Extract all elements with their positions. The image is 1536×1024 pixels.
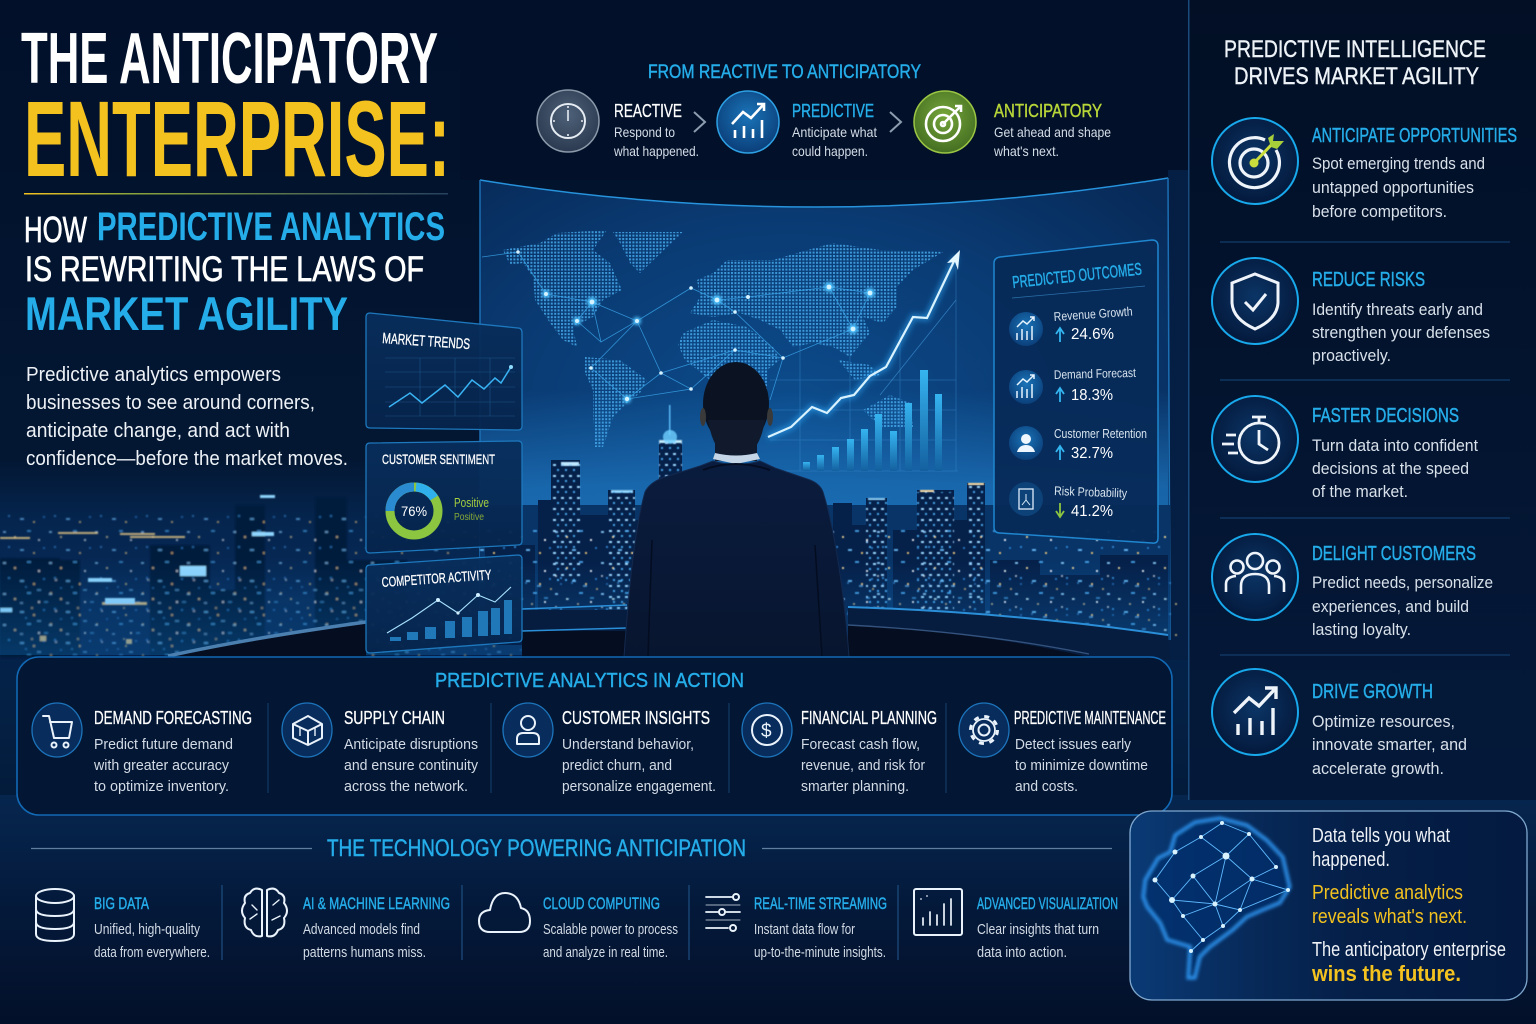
tech: real-time streaming: REAL-TIME STREAMING bbox=[754, 894, 887, 913]
panel: predicted outcomes bbox=[994, 240, 1158, 543]
benefit: drive growth: innovate smarter, and bbox=[1312, 735, 1467, 754]
arrow: predictive to anticipatory bbox=[890, 112, 901, 132]
step: reactive: Respond to bbox=[614, 124, 675, 140]
title bbox=[21, 19, 450, 199]
panel: predictive intelligence drives market agility: DRIVES MARKET AGILITY bbox=[1234, 63, 1479, 90]
left city skyline bbox=[0, 460, 657, 664]
item: supply chain: across the network. bbox=[344, 778, 468, 795]
item: financial planning bbox=[742, 703, 937, 795]
tech: real-time streaming bbox=[706, 894, 887, 961]
tech: advanced visualization: data into action. bbox=[977, 944, 1067, 961]
step: anticipatory: what's next. bbox=[993, 143, 1059, 159]
step: predictive bbox=[717, 91, 877, 159]
tech: big data: data from everywhere. bbox=[94, 944, 210, 961]
intro paragraph: businesses to see around corners, bbox=[26, 392, 315, 414]
central holographic screen bbox=[480, 178, 1181, 645]
growth arrow bbox=[768, 250, 960, 437]
item: demand forecasting: DEMAND FORECASTING bbox=[94, 708, 252, 728]
railing and floor bbox=[168, 605, 1170, 660]
benefit: delight customers: Predict needs, personalize bbox=[1312, 573, 1493, 592]
benefit: faster decisions: of the market. bbox=[1312, 482, 1408, 501]
item: predictive maintenance: Detect issues early bbox=[1015, 736, 1131, 753]
benefit: reduce risks: proactively. bbox=[1312, 346, 1391, 365]
item: supply chain: SUPPLY CHAIN bbox=[344, 708, 445, 728]
benefit: reduce risks: strengthen your defenses bbox=[1312, 323, 1490, 342]
step: predictive: could happen. bbox=[792, 143, 868, 159]
benefit: drive growth bbox=[1212, 669, 1467, 778]
chart bars bbox=[803, 370, 942, 471]
benefit: faster decisions bbox=[1212, 396, 1478, 501]
step: anticipatory bbox=[914, 91, 1111, 159]
benefit: delight customers bbox=[1212, 534, 1493, 639]
panel: customer sentiment: 76% bbox=[401, 504, 427, 519]
tech: advanced visualization: ADVANCED VISUALIZATION bbox=[977, 894, 1118, 913]
tech: ai and machine learning: Advanced models find bbox=[303, 921, 420, 938]
item: demand forecasting bbox=[32, 703, 252, 795]
outcome: demand forecast: Demand Forecast bbox=[1054, 366, 1136, 382]
step: reactive: what happened. bbox=[613, 143, 699, 159]
step: reactive bbox=[537, 90, 699, 159]
item: customer insights bbox=[503, 703, 716, 795]
item: financial planning: Forecast cash flow, bbox=[801, 736, 920, 753]
item: predictive maintenance: PREDICTIVE MAINTENANCE bbox=[1014, 708, 1166, 728]
step: predictive: PREDICTIVE bbox=[792, 101, 874, 121]
tech: big data: Unified, high-quality bbox=[94, 921, 200, 938]
intro paragraph: Predictive analytics empowers bbox=[26, 364, 281, 386]
panel: predictive intelligence drives market agility bbox=[1212, 36, 1517, 778]
item: predictive maintenance: to minimize downtime bbox=[1015, 757, 1148, 774]
benefit: anticipate opportunities: untapped opportunities bbox=[1312, 178, 1474, 197]
tech: ai and machine learning: AI & MACHINE LEARNING bbox=[303, 894, 450, 913]
tech: big data bbox=[36, 889, 210, 961]
benefit: delight customers: DELIGHT CUSTOMERS bbox=[1312, 543, 1476, 565]
benefit: drive growth: DRIVE GROWTH bbox=[1312, 681, 1433, 703]
intro paragraph: confidence—before the market moves. bbox=[26, 448, 348, 470]
benefit: drive growth: accelerate growth. bbox=[1312, 759, 1444, 778]
tech: big data: BIG DATA bbox=[94, 894, 149, 913]
intro paragraph: anticipate change, and act with bbox=[26, 420, 290, 442]
item: customer insights: personalize engagement. bbox=[562, 778, 716, 795]
benefit: faster decisions: Turn data into confident bbox=[1312, 436, 1478, 455]
panel: predictive analytics in action: PREDICTIVE ANALYTICS IN ACTION bbox=[435, 670, 744, 692]
tech: ai and machine learning: patterns humans miss. bbox=[303, 944, 426, 961]
title divider bbox=[24, 193, 448, 194]
growth chart bbox=[768, 250, 960, 471]
panel: market trends bbox=[366, 313, 522, 430]
person silhouette bbox=[624, 362, 849, 657]
item: financial planning: revenue, and risk for bbox=[801, 757, 925, 774]
outcome: revenue growth bbox=[1009, 305, 1133, 346]
city on screen bbox=[480, 405, 1181, 645]
subtitle: IS REWRITING THE LAWS OF bbox=[25, 250, 424, 289]
callout text: happened. bbox=[1312, 849, 1390, 871]
title: ENTERPRISE: bbox=[24, 78, 450, 199]
outcome: risk probability bbox=[1009, 482, 1128, 520]
tech: cloud computing: Scalable power to process bbox=[543, 921, 678, 938]
item: financial planning: smarter planning. bbox=[801, 778, 909, 795]
outcome: risk probability: 41.2% bbox=[1071, 503, 1113, 520]
item: customer insights: predict churn, and bbox=[562, 757, 672, 774]
item: demand forecasting: Predict future demand bbox=[94, 736, 233, 753]
subtitle bbox=[24, 205, 445, 340]
benefit: delight customers: lasting loyalty. bbox=[1312, 620, 1411, 639]
step: anticipatory: ANTICIPATORY bbox=[994, 101, 1102, 121]
tech: cloud computing: and analyze in real time. bbox=[543, 944, 668, 961]
subtitle: MARKET AGILITY bbox=[25, 287, 348, 340]
panel: customer sentiment bbox=[366, 441, 522, 553]
outcome: revenue growth: 24.6% bbox=[1071, 326, 1114, 343]
step: anticipatory: Get ahead and shape bbox=[994, 124, 1111, 140]
step: reactive: REACTIVE bbox=[614, 101, 682, 121]
reactive to anticipatory strip bbox=[537, 62, 1111, 159]
item: financial planning: $ bbox=[761, 721, 772, 742]
arrow: reactive to predictive bbox=[694, 112, 705, 132]
benefit: anticipate opportunities: before competitors. bbox=[1312, 202, 1447, 221]
callout text: wins the future. bbox=[1311, 961, 1461, 986]
panel: customer sentiment: Positive bbox=[454, 512, 484, 523]
tech: advanced visualization bbox=[914, 889, 1118, 961]
subtitle: PREDICTIVE ANALYTICS bbox=[97, 205, 445, 249]
subtitle: HOW bbox=[24, 209, 87, 250]
panel: competitor activity: COMPETITOR ACTIVITY bbox=[381, 566, 492, 590]
outcome: demand forecast bbox=[1009, 366, 1136, 404]
outcome: demand forecast: 18.3% bbox=[1071, 387, 1113, 404]
panel: customer sentiment: CUSTOMER SENTIMENT bbox=[382, 451, 495, 467]
benefit: reduce risks: Identify threats early and bbox=[1312, 300, 1483, 319]
item: predictive maintenance bbox=[959, 703, 1166, 795]
tech: real-time streaming: Instant data flow for bbox=[754, 921, 855, 938]
panel: competitor activity bbox=[366, 555, 522, 653]
outcome: risk probability: Risk Probability bbox=[1054, 484, 1128, 501]
outcome: revenue growth: Revenue Growth bbox=[1053, 305, 1133, 324]
benefit: drive growth: Optimize resources, bbox=[1312, 712, 1455, 731]
benefit: anticipate opportunities bbox=[1212, 118, 1517, 221]
callout: data tells you bbox=[1130, 811, 1527, 1000]
benefit: anticipate opportunities: Spot emerging trends and bbox=[1312, 154, 1485, 173]
outcome: customer retention: Customer Retention bbox=[1054, 427, 1147, 441]
item: customer insights: Understand behavior, bbox=[562, 736, 694, 753]
callout text: Predictive analytics bbox=[1312, 882, 1463, 904]
callout text: reveals what's next. bbox=[1312, 906, 1467, 928]
intro paragraph bbox=[26, 364, 348, 470]
panel: technology powering anticipation: THE TECHNOLOGY POWERING ANTICIPATION bbox=[327, 835, 746, 862]
benefit: faster decisions: FASTER DECISIONS bbox=[1312, 405, 1459, 427]
panel: market trends: MARKET TRENDS bbox=[382, 330, 471, 353]
item: demand forecasting: with greater accuracy bbox=[93, 757, 229, 774]
item: supply chain bbox=[282, 703, 478, 795]
outcome: customer retention: 32.7% bbox=[1071, 445, 1113, 462]
tech: advanced visualization: Clear insights that turn bbox=[977, 921, 1099, 938]
item: financial planning: FINANCIAL PLANNING bbox=[801, 708, 937, 728]
panel: predictive analytics in action bbox=[17, 657, 1172, 815]
outcome: customer retention bbox=[1009, 426, 1147, 462]
tech: real-time streaming: up-to-the-minute insights. bbox=[754, 944, 886, 961]
item: supply chain: and ensure continuity bbox=[344, 757, 478, 774]
callout text bbox=[1311, 825, 1506, 986]
panel: customer sentiment: Positive bbox=[454, 496, 489, 510]
world map dots bbox=[503, 230, 943, 447]
item: demand forecasting: to optimize inventory. bbox=[94, 778, 229, 795]
reactive to anticipatory strip: FROM REACTIVE TO ANTICIPATORY bbox=[648, 62, 921, 83]
benefit: reduce risks: REDUCE RISKS bbox=[1312, 269, 1425, 291]
item: customer insights: CUSTOMER INSIGHTS bbox=[562, 708, 710, 728]
tech: cloud computing bbox=[479, 893, 678, 961]
tech: cloud computing: CLOUD COMPUTING bbox=[543, 894, 660, 913]
callout text: Data tells you what bbox=[1312, 825, 1450, 847]
tech: ai and machine learning bbox=[242, 889, 450, 961]
benefit: delight customers: experiences, and build bbox=[1312, 597, 1469, 616]
donut chart bbox=[390, 487, 438, 535]
panel: technology powering anticipation bbox=[31, 835, 1118, 961]
benefit: reduce risks bbox=[1212, 258, 1490, 365]
network connections bbox=[482, 250, 875, 403]
step: predictive: Anticipate what bbox=[792, 124, 877, 140]
icon: glowing brain bbox=[1143, 818, 1290, 978]
panel: predicted outcomes: PREDICTED OUTCOMES bbox=[1011, 259, 1143, 292]
item: supply chain: Anticipate disruptions bbox=[344, 736, 478, 753]
benefit: faster decisions: decisions at the speed bbox=[1312, 459, 1469, 478]
item: predictive maintenance: and costs. bbox=[1015, 778, 1078, 795]
title: THE ANTICIPATORY bbox=[21, 19, 438, 99]
